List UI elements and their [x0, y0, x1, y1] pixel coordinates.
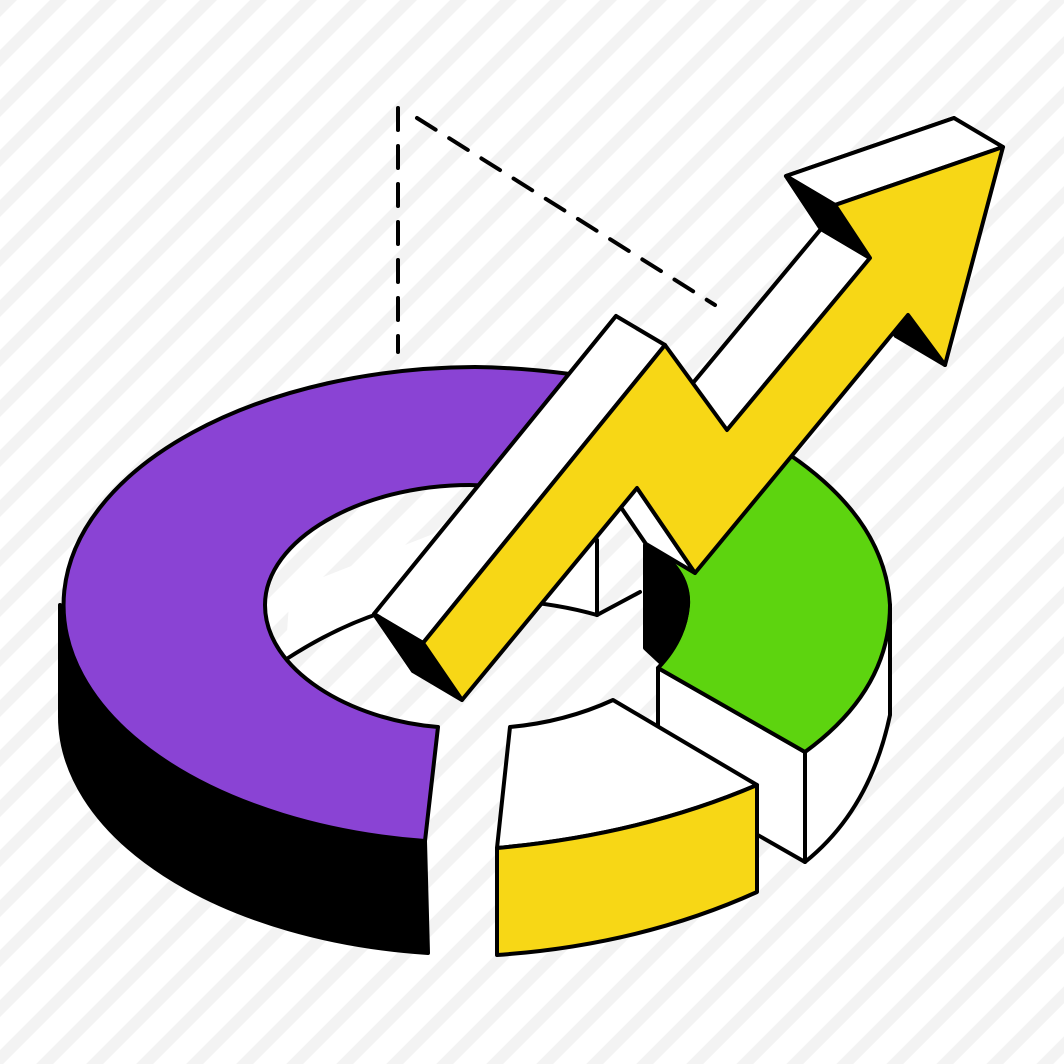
dashed guide lines: [398, 108, 715, 352]
arrow: [374, 118, 1003, 700]
arrow face: [423, 147, 1003, 700]
front face: [497, 785, 757, 955]
green top: [650, 455, 890, 752]
green segment: [645, 455, 890, 862]
yellow segment: [497, 700, 757, 955]
black side: [60, 605, 428, 953]
arrow extrusion: [374, 118, 954, 671]
inner hole back wall: [285, 500, 640, 660]
purple segment: [60, 367, 660, 953]
black facets: [374, 614, 462, 700]
purple top: [64, 367, 660, 841]
inner black wall: [645, 545, 688, 662]
top face: [497, 700, 757, 848]
green side wall: [805, 605, 890, 862]
